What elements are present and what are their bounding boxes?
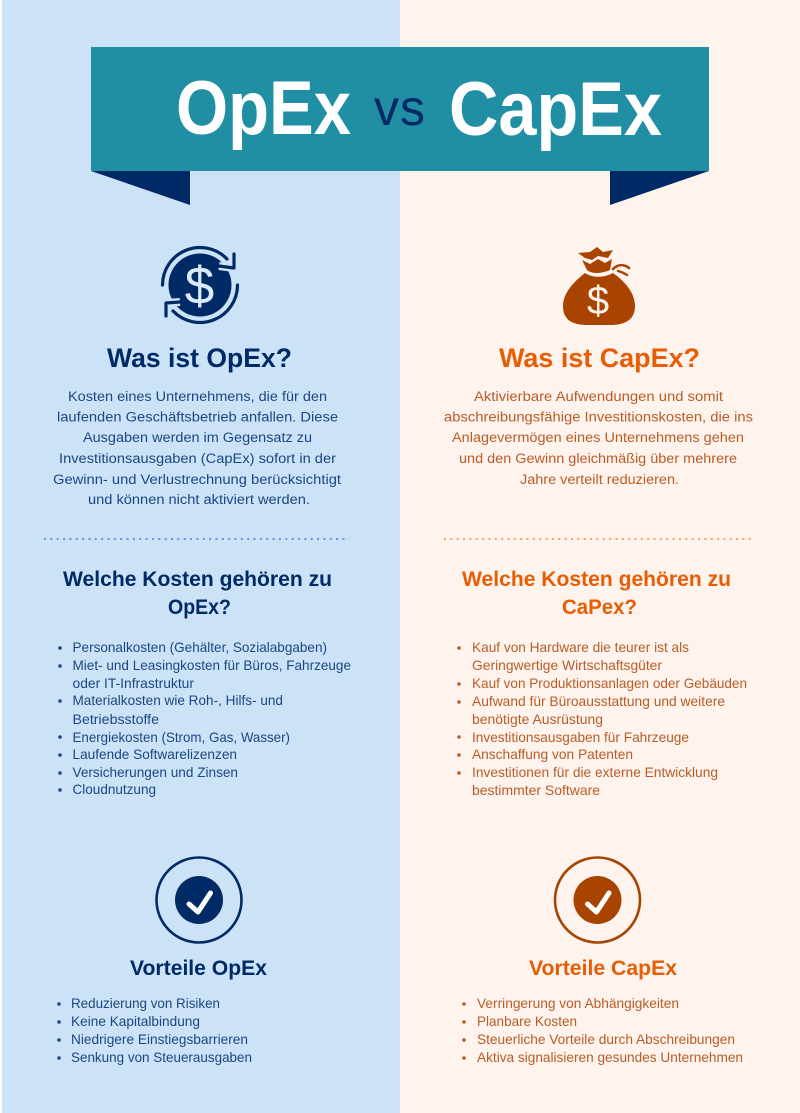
heading: Welche Kosten OpEx: OpEx? [168,595,231,619]
text block: CapEx definition [444,389,753,488]
list: OpEx costs: Energiekosten (Strom, Gas, Wasser) [72,730,290,745]
list: CapEx costs: Aufwand für Büroausstattung und weitere [472,694,725,709]
title: OpEx: OpEx [176,66,351,151]
icon: money bag: $ [587,279,609,323]
heading: Welche Kosten CapEx: Welche Kosten gehören zu [462,567,731,591]
list: CapEx advantages: Verringerung von Abhängigkeiten [477,996,679,1011]
heading: Welche Kosten CapEx: CaPex? [562,595,637,619]
list: OpEx costs: Personalkosten (Gehälter, Sozialabgaben) [72,640,327,655]
heading: Was ist OpEx?: Was ist OpEx? [107,343,292,373]
icon: dollar with circular arrows: $ [185,257,214,316]
list: OpEx costs: Betriebsstoffe [72,712,159,727]
banner left ribbon fold [91,171,190,205]
list: CapEx costs: Kauf von Hardware die teurer ist als [472,640,689,655]
list: CapEx advantages [462,996,743,1065]
list: OpEx costs: Materialkosten wie Roh-, Hilfs- und [72,693,283,708]
list: OpEx costs: Miet- und Leasingkosten für Büros, Fahrzeuge [72,658,351,673]
icon: CapEx check badge [555,858,640,942]
list: CapEx costs: Investitionsausgaben für Fahrzeuge [472,730,689,745]
heading: Vorteile CapEx: Vorteile CapEx [529,956,677,980]
list: OpEx costs: Laufende Softwarelizenzen [72,747,237,762]
list: OpEx costs: Versicherungen und Zinsen [72,765,238,780]
text block: OpEx definition: Kosten eines Unternehmens, die für den [68,389,327,405]
heading: Welche Kosten CapEx [462,567,731,619]
text block: OpEx definition: Gewinn- und Verlustrechnung berücksichtigt [53,472,341,488]
list: CapEx costs: benötigte Ausrüstung [472,712,603,727]
panel: CapEx background [400,0,800,1113]
list: OpEx advantages: Senkung von Steuerausgaben [71,1050,252,1065]
list: OpEx costs: oder IT-Infrastruktur [72,676,194,691]
text block: CapEx definition: Anlagevermögen eines Unternehmens gehen [452,430,744,446]
list: CapEx costs: Geringwertige Wirtschaftsgüter [472,658,662,673]
text block: OpEx definition [53,389,341,508]
list: OpEx advantages [57,996,252,1065]
icon: money bag [563,247,635,325]
list: CapEx advantages: Planbare Kosten [477,1014,577,1029]
list: CapEx advantages: Aktiva signalisieren gesundes Unternehmen [477,1050,743,1065]
text block: CapEx definition: abschreibungsfähige Investitionskosten, die ins [444,410,753,426]
banner right ribbon fold [610,171,709,205]
heading: Welche Kosten OpEx: Welche Kosten gehören zu [63,567,332,591]
list: OpEx advantages: Keine Kapitalbindung [71,1014,200,1029]
list: CapEx costs: Anschaffung von Patenten [472,747,633,762]
text block: OpEx definition: Investitionsausgaben (CapEx) sofort in der [59,451,336,467]
list: CapEx costs: Investitionen für die externe Entwicklung [472,765,718,780]
list: CapEx advantages: Steuerliche Vorteile durch Abschreibungen [477,1032,735,1047]
list: CapEx costs: bestimmter Software [472,783,600,798]
list: CapEx costs: Kauf von Produktionsanlagen oder Gebäuden [472,676,747,691]
icon: OpEx check badge [156,858,242,942]
list: OpEx costs [58,640,351,797]
title: CapEx: CapEx [449,67,662,152]
list: CapEx costs [457,640,747,798]
text block: CapEx definition: Aktivierbare Aufwendungen und somit [474,389,723,405]
list: OpEx advantages: Niedrigere Einstiegsbarrieren [71,1032,248,1047]
text block: OpEx definition: und können nicht aktiviert werden. [88,492,310,508]
heading: Vorteile OpEx: Vorteile OpEx [130,956,267,980]
list: OpEx costs: Cloudnutzung [72,782,156,797]
text block: OpEx definition: Ausgaben werden im Gegensatz zu [83,430,312,446]
icon: dollar with circular arrows [162,248,238,322]
text block: CapEx definition: Jahre verteilt reduzieren. [520,472,679,488]
title: vs: vs [374,80,425,136]
text block: CapEx definition: und den Gewinn gleichmäßig über mehrere [459,451,737,467]
list: OpEx advantages: Reduzierung von Risiken [71,996,220,1011]
title banner [91,47,709,205]
panel: OpEx background [2,0,400,1113]
heading: Welche Kosten OpEx [63,567,332,619]
text block: OpEx definition: laufenden Geschäftsbetrieb anfallen. Diese [57,410,338,426]
banner band [91,47,709,171]
heading: Was ist CapEx?: Was ist CapEx? [499,343,700,373]
